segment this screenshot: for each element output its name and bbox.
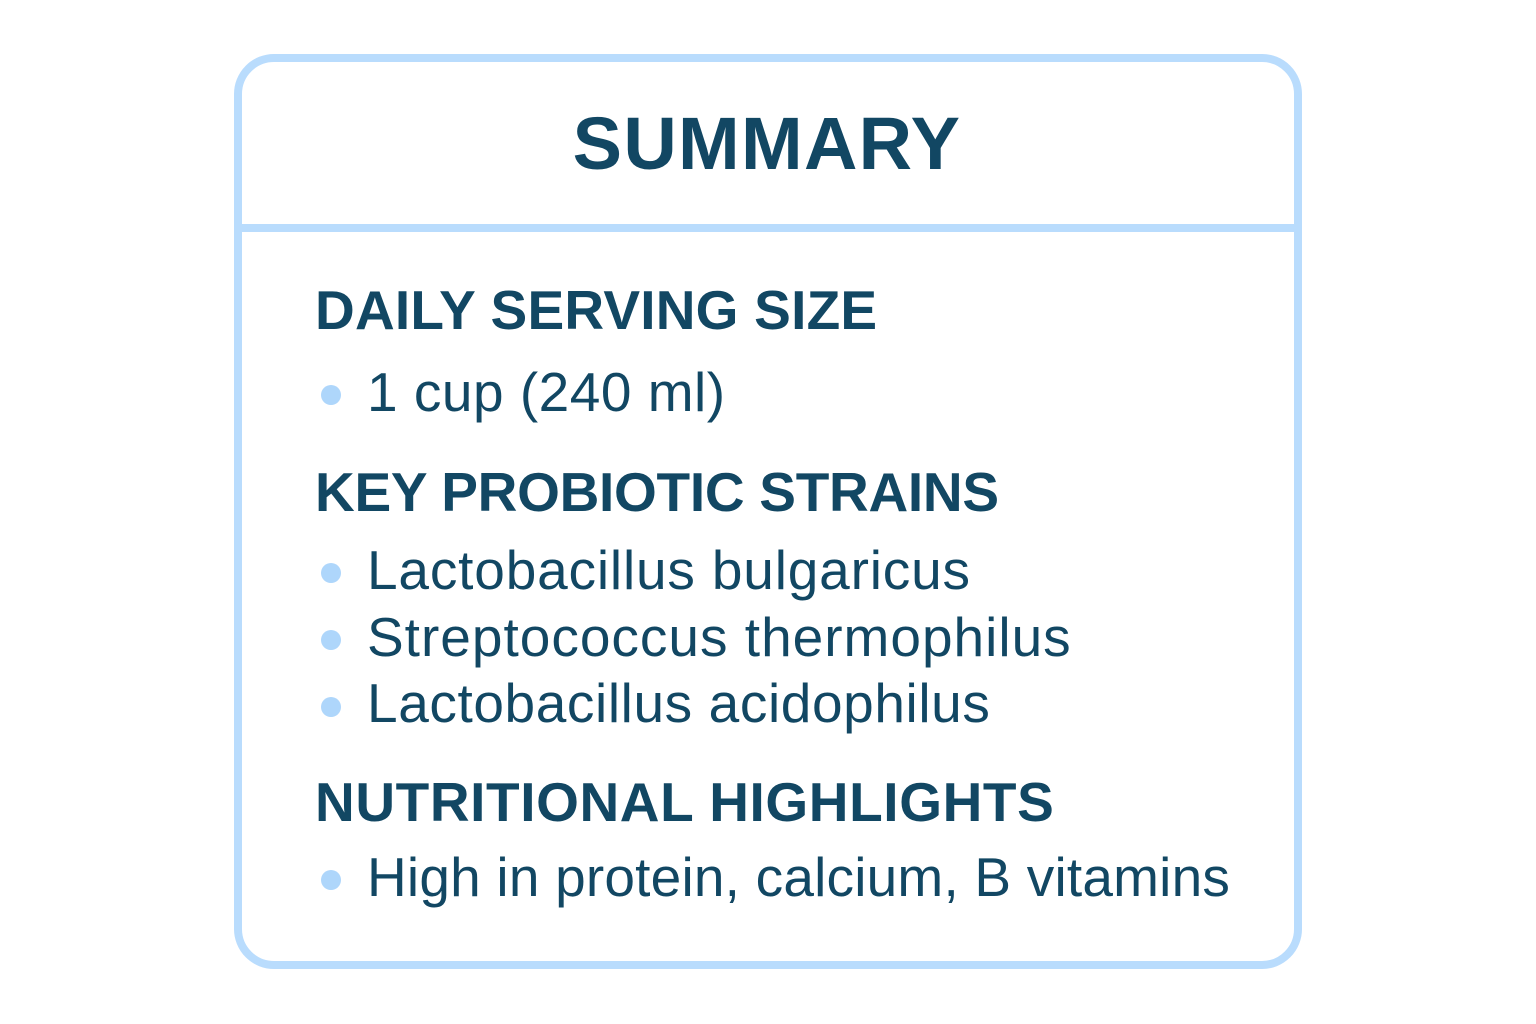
bullet: strain 1 <box>321 563 341 583</box>
text: strain 2: Streptococcus thermophilus <box>367 606 1072 668</box>
bullet: strain 2 <box>321 630 341 650</box>
title: SUMMARY <box>573 102 961 185</box>
text: serving size: 1 cup (240 ml) <box>367 361 726 423</box>
text: strain 1: Lactobacillus bulgaricus <box>367 539 971 601</box>
heading: daily serving size: DAILY SERVING SIZE <box>315 279 877 341</box>
heading: key probiotic strains: KEY PROBIOTIC STRAINS <box>315 461 999 523</box>
bullet: nutrition <box>321 870 341 890</box>
panel: summary card <box>234 54 1302 969</box>
heading: nutritional highlights: NUTRITIONAL HIGHLIGHTS <box>315 771 1054 833</box>
bullet: strain 3 <box>321 697 341 717</box>
text: nutrition: High in protein, calcium, B vitamins <box>367 846 1230 908</box>
bullet: serving <box>321 385 341 405</box>
text: strain 3: Lactobacillus acidophilus <box>367 672 990 734</box>
header divider <box>241 224 1295 232</box>
